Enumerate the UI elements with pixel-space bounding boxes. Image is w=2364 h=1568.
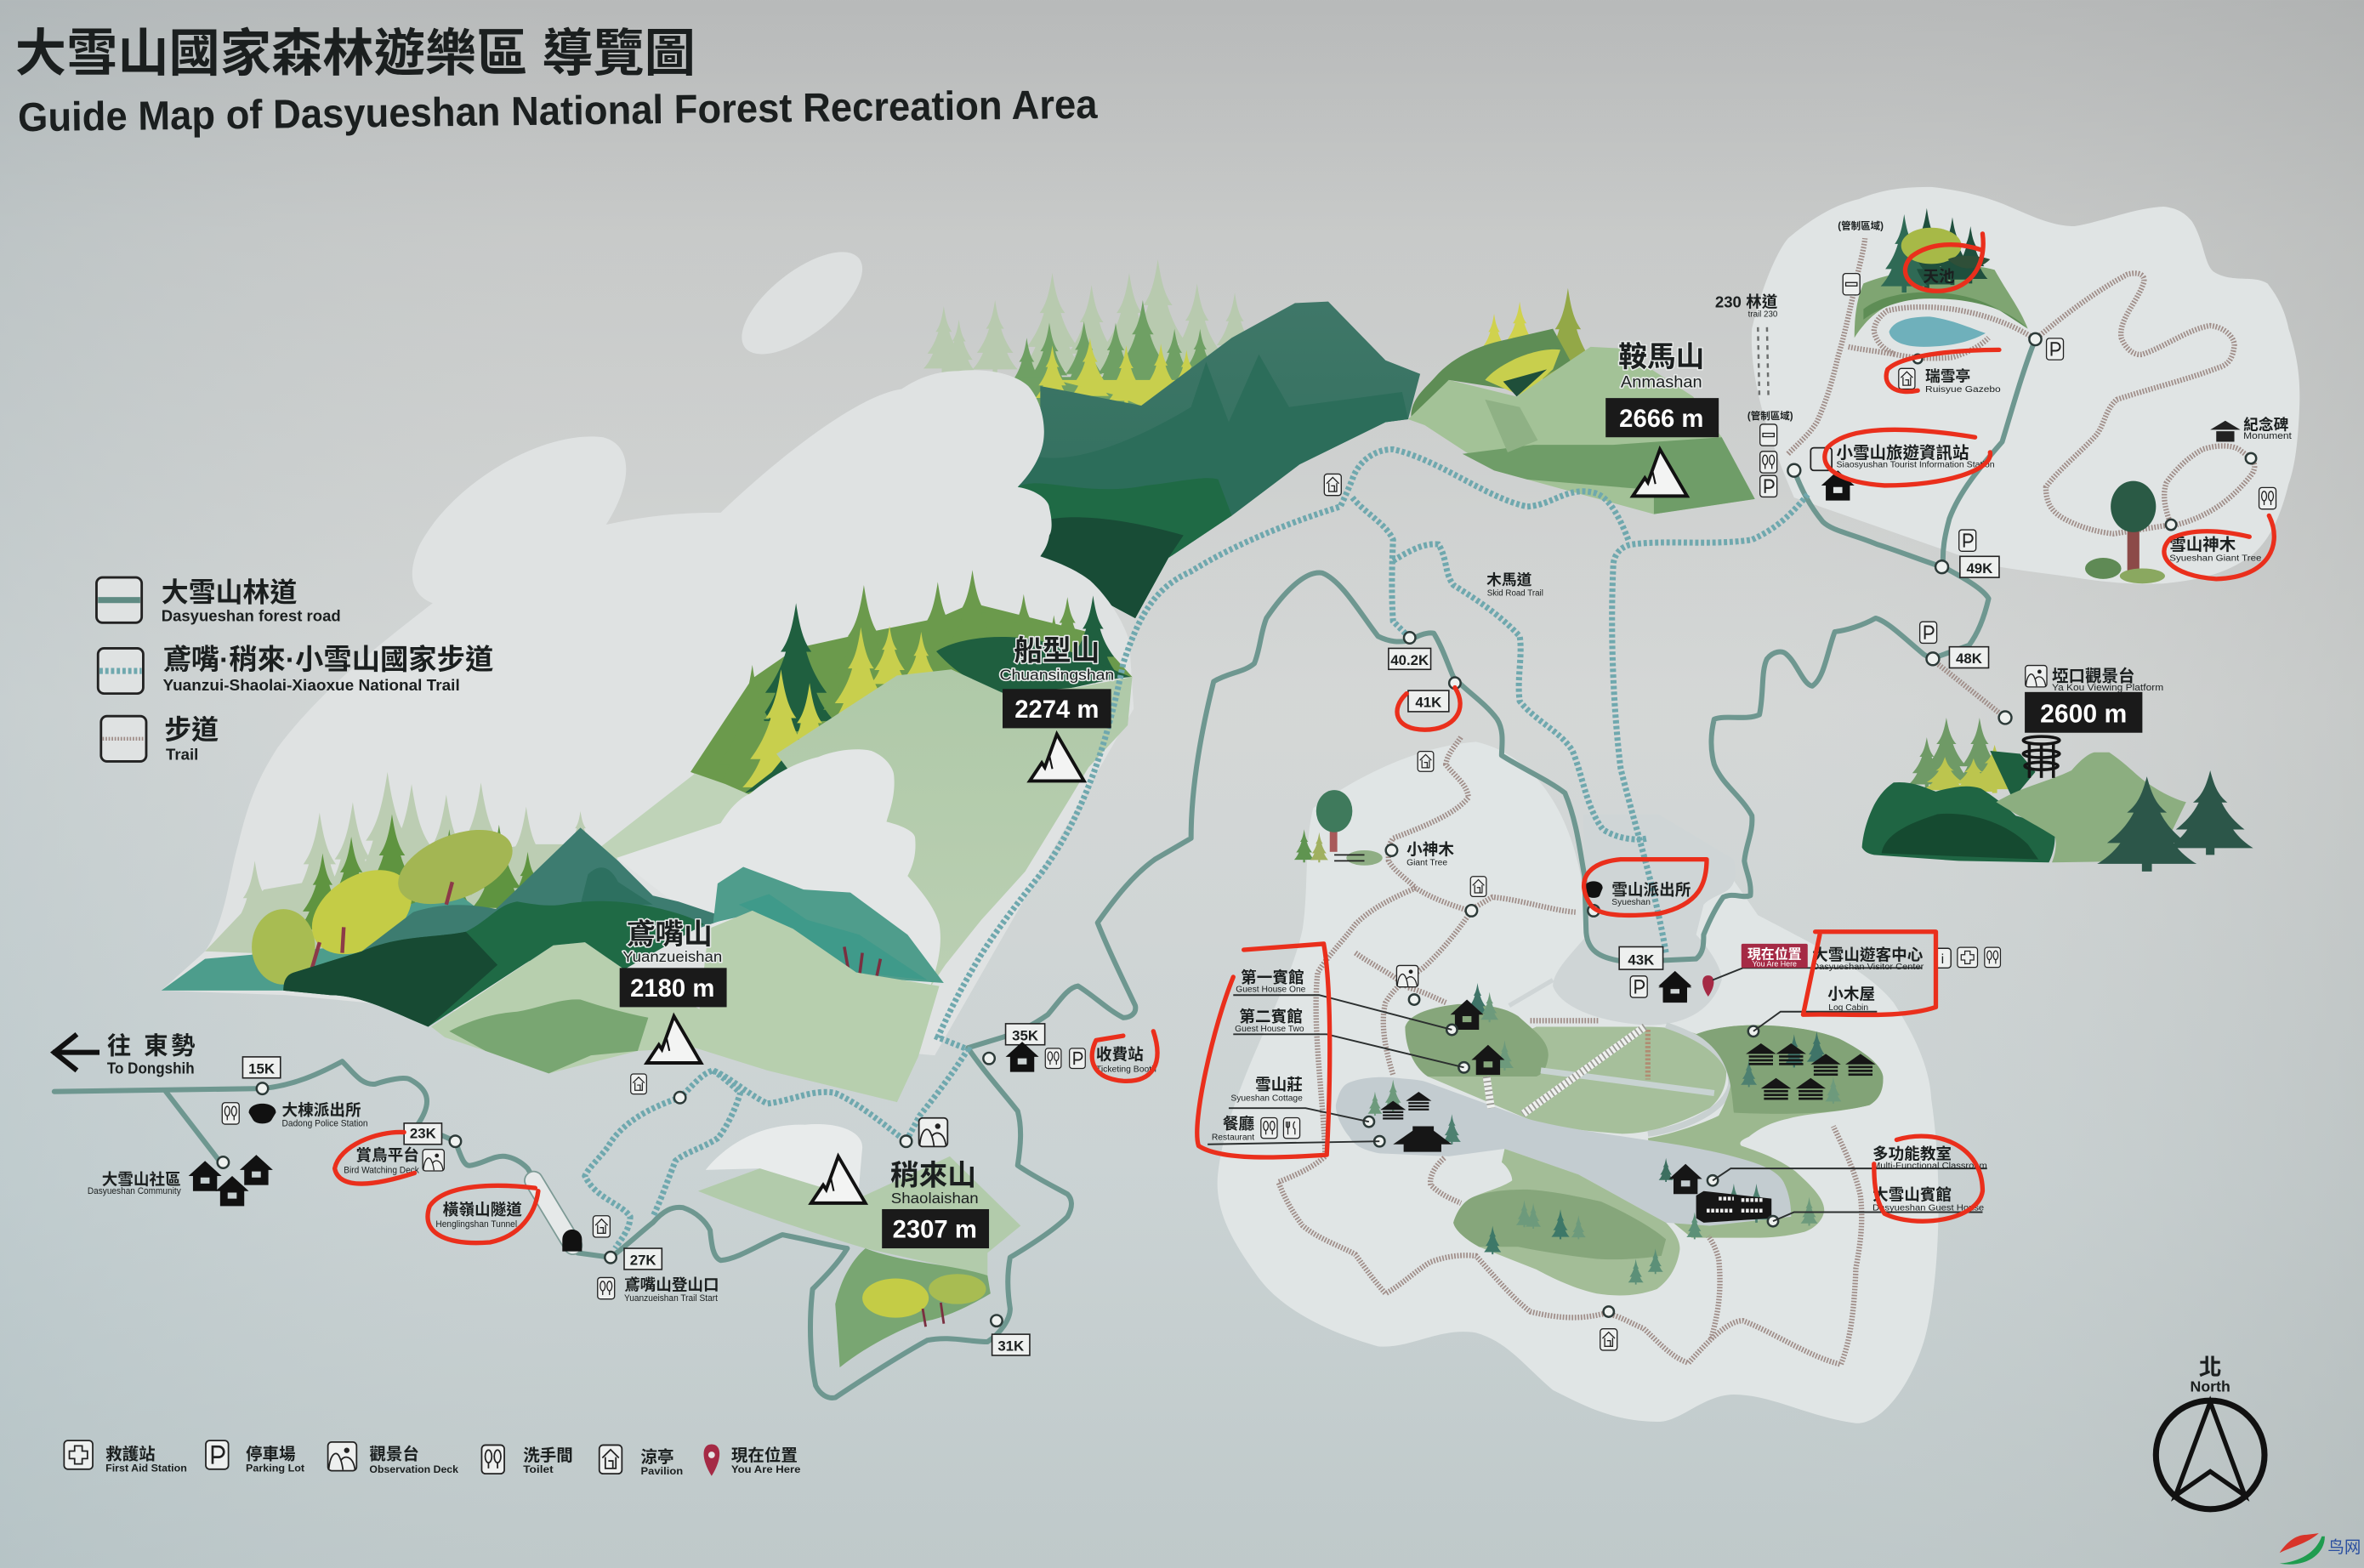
ticketing booth cluster [1006, 1042, 1156, 1075]
tunnel [534, 1180, 582, 1252]
Dadong police station: Dadong Police Station [282, 1118, 368, 1128]
log cabin label [1753, 986, 1877, 1031]
classroom and guest house labels: Dasyueshan Guest House [1872, 1204, 1985, 1213]
watermark logo: 鸟网 [2327, 1538, 2361, 1557]
trail 230 label: trail 230 [1748, 310, 1778, 319]
peak: Yuanzueishan: 2180 m [630, 975, 714, 1003]
region: Xiaoxueshan pale land [1752, 187, 2299, 584]
legend: road types [96, 577, 493, 764]
giant tree [2085, 481, 2165, 583]
km markers: 49K [1966, 560, 1992, 577]
road: community spur [166, 1092, 222, 1164]
restricted zone labels: (管制區域) [1747, 410, 1793, 422]
legend: facility icons: Toilet [523, 1463, 554, 1475]
white cloud land mass [162, 370, 1134, 1055]
pavilions on trail [593, 474, 1617, 1350]
Dadong police station [222, 1101, 368, 1128]
mountain group: central ridge [923, 259, 1420, 618]
inner white cloud [617, 749, 940, 1010]
km markers: 23K [410, 1126, 436, 1142]
Xiaoxueshan tourist info: 小雪山旅遊資訊站 [1836, 443, 1969, 463]
peak: Chuansingshan: 船型山 [1014, 635, 1100, 668]
title: Guide Map of Dasyueshan National Forest Recreation Area [18, 82, 1098, 140]
peak: Anmashan: 鞍馬山 [1618, 341, 1704, 373]
label: Dasyueshan community: Dasyueshan Community [88, 1186, 181, 1196]
visitor center [1630, 944, 2000, 1001]
bird watching deck [344, 1146, 444, 1175]
Henglingshan tunnel label: Henglingshan Tunnel [435, 1219, 517, 1230]
legend: facility icons: Pavilion [641, 1465, 683, 1477]
legend: road types: 大雪山林道 [162, 577, 297, 607]
community houses [189, 1155, 273, 1206]
legend: facility icons: Observation Deck [369, 1463, 458, 1475]
ticketing booth cluster: 收費站 [1096, 1045, 1144, 1063]
km markers: 43K [1628, 952, 1654, 969]
km markers: 27K [630, 1253, 656, 1269]
mountain group: Anmashan [1408, 288, 1755, 514]
km markers: 40.2K [1390, 652, 1429, 668]
Yuanzuishan trail start [598, 1276, 719, 1304]
km markers: 48K [1956, 650, 1982, 667]
legend: facility icons: Parking Lot [246, 1462, 304, 1474]
skid road label: Skid Road Trail [1487, 588, 1543, 598]
peak: Yakou platform: 2600 m [2040, 700, 2127, 728]
legend: facility icons: 救護站 [105, 1444, 156, 1463]
label: Dasyueshan community: 大雪山社區 [102, 1171, 181, 1189]
cloud ellipse [725, 234, 878, 372]
mountain group: Chuansingshan [690, 570, 1132, 1025]
peak: Anmashan: 2666 m [1619, 406, 1703, 433]
darker log cabin meadow [1696, 1025, 1884, 1114]
km markers: 31K [997, 1338, 1024, 1355]
guest house labels [1208, 969, 1464, 1145]
lane [1336, 1077, 1791, 1225]
skid road label: 木馬道 [1486, 571, 1532, 588]
monument: 紀念碑 [2243, 415, 2289, 433]
km markers: 35K [1012, 1027, 1038, 1043]
peak: Chuansingshan [999, 635, 1114, 781]
title [15, 24, 1098, 140]
hand-drawn red annotations [335, 234, 2274, 1243]
Xiaoxueshan tourist info [1810, 443, 1995, 501]
green pod: lower lawn [1453, 1149, 1679, 1295]
green pod: guest houses [1405, 1004, 1549, 1077]
km markers [242, 556, 1999, 1355]
km markers: 15K [248, 1060, 275, 1077]
Yuanzuishan trail start: Yuanzueishan Trail Start [624, 1293, 718, 1304]
small giant tree label: Giant Tree [1406, 859, 1447, 868]
lower lawn dark meadow [1453, 1190, 1666, 1259]
Syueshan police label [1584, 881, 1691, 907]
classroom and guest house labels: 多功能教室 [1872, 1145, 1952, 1162]
trail 230 label [1715, 293, 1778, 319]
Syueshan giant tree label [2169, 536, 2262, 564]
label: to Dongshih: 往 東勢 [107, 1032, 198, 1060]
monument [2210, 415, 2292, 442]
peak: Chuansingshan: 2274 m [1014, 696, 1099, 724]
classroom and guest house labels: 大雪山賓館 [1872, 1185, 1952, 1203]
km markers: 41K [1415, 695, 1441, 711]
trail 230 double dashed [1758, 327, 1769, 400]
peak: Yuanzueishan [620, 918, 727, 1063]
guest house labels: Restaurant [1212, 1133, 1254, 1142]
guest house labels: 雪山莊 [1255, 1076, 1303, 1094]
region: central forest area [1218, 741, 1939, 1423]
bird watching deck: 賞鳥平台 [355, 1146, 419, 1164]
legend: road types: Yuanzui-Shaolai-Xiaoxue National Trail [162, 676, 460, 694]
visitor center: i [1941, 952, 1944, 967]
peak: Shaolaishan group [698, 1124, 1020, 1367]
label: to Dongshih [107, 1032, 198, 1077]
observation icons [919, 965, 1418, 1146]
Ruixue gazebo: Ruisyue Gazebo [1925, 385, 2001, 395]
Tianchi label: 天池 [1923, 268, 1955, 286]
peak: Shaolaishan group: 2307 m [893, 1217, 977, 1244]
peak: Yakou platform: Ya Kou Viewing Platform [2052, 683, 2163, 693]
guest house labels: 第一賓館 [1241, 969, 1304, 986]
ticketing booth cluster: Ticketing Booth [1096, 1065, 1156, 1075]
Ruixue gazebo: 瑞雪亭 [1925, 367, 1970, 385]
small giant tree [1294, 790, 1383, 866]
watermark logo [2280, 1533, 2361, 1565]
peak: Chuansingshan: Chuansingshan [999, 667, 1114, 684]
peak: Yuanzueishan: Yuanzueishan [622, 948, 722, 965]
legend: facility icons: First Aid Station [105, 1462, 187, 1474]
legend: facility icons [64, 1440, 801, 1477]
peak: Yakou platform [2025, 666, 2163, 733]
mountain: Yakou [1862, 718, 2253, 872]
Syueshan police label: 雪山派出所 [1611, 881, 1691, 899]
restricted zone labels: (管制區域) [1838, 220, 1884, 232]
national trail network [585, 449, 1808, 1248]
legend: road types: 步道 [164, 714, 219, 745]
classroom and guest house labels: Multi-Functional Classroom [1872, 1162, 1987, 1171]
small giant tree label [1406, 840, 1454, 868]
lawn [1428, 1026, 1726, 1133]
observation tower [2023, 736, 2060, 778]
pond and Tianchi hill [1855, 208, 2028, 347]
peak: Yakou platform: 埡口觀景台 [2052, 666, 2135, 685]
Dadong police station: 大棟派出所 [282, 1101, 361, 1119]
guest house labels: 餐廳 [1223, 1115, 1254, 1133]
road nodes [218, 333, 2256, 1327]
legend: road types: 鳶嘴·稍來·小雪山國家步道 [162, 645, 493, 676]
Syueshan police label: Syueshan [1611, 898, 1651, 907]
title: 大雪山國家森林遊樂區 導覽圖 [15, 24, 696, 82]
north compass: North [2191, 1378, 2230, 1395]
guest house labels: Guest House Two [1235, 1025, 1304, 1034]
guest house labels: 第二賓館 [1239, 1008, 1303, 1025]
north compass [2156, 1355, 2265, 1509]
Xiaoxueshan tourist info: Siaosyushan Tourist Information Station [1836, 461, 1995, 470]
road: forest road 200 [54, 339, 2035, 1398]
Henglingshan tunnel label [435, 1201, 522, 1230]
legend: facility icons: 洗手間 [523, 1446, 573, 1465]
Yuanzuishan trail start: 鳶嘴山登山口 [624, 1276, 719, 1294]
north compass: 北 [2199, 1355, 2221, 1380]
Syueshan giant tree label: Syueshan Giant Tree [2169, 554, 2262, 564]
road: spur to Xiaoxueshan station [1794, 470, 1942, 567]
gray visitor center zone [1553, 814, 1736, 1025]
trail 230 label: 230 林道 [1715, 293, 1778, 311]
restricted zone labels [1747, 220, 1884, 422]
Henglingshan tunnel label: 橫嶺山隧道 [443, 1201, 522, 1219]
legend: facility icons: 觀景台 [369, 1444, 419, 1463]
legend: facility icons: 涼亭 [641, 1447, 674, 1467]
parking and restricted icons north [1760, 274, 2276, 643]
legend: road types: Trail [166, 746, 198, 764]
peak: Anmashan: Anmashan [1621, 373, 1702, 392]
trees and buildings in forest area [1367, 973, 1876, 1285]
guest house labels: Syueshan Cottage [1230, 1094, 1303, 1103]
Ruixue gazebo [1899, 367, 2001, 395]
peak: Anmashan [1605, 341, 1719, 496]
Syueshan giant tree label: 雪山神木 [2169, 536, 2236, 554]
bird watching deck: Bird Watching Deck [344, 1165, 420, 1175]
small giant tree label: 小神木 [1406, 840, 1454, 858]
visitor center: 現在位置 [1747, 946, 1802, 963]
legend: facility icons: 停車場 [246, 1445, 296, 1463]
hiking trail network [1278, 238, 2254, 1365]
label: to Dongshih: To Dongshih [107, 1059, 195, 1077]
label: Dasyueshan community [88, 1171, 181, 1196]
guest house labels: Guest House One [1236, 986, 1306, 995]
lower-left pale slope [600, 774, 749, 860]
log cabin label: Log Cabin [1828, 1003, 1868, 1013]
peak: Yuanzueishan: 鳶嘴山 [627, 918, 713, 951]
legend: facility icons: 現在位置 [731, 1446, 798, 1465]
legend: road types: Dasyueshan forest road [162, 607, 341, 625]
arrow to Dongshih [53, 1034, 99, 1071]
visitor center: You Are Here [1753, 960, 1797, 969]
skid road label [1486, 571, 1543, 598]
lawn ring road [1648, 1025, 1731, 1133]
visitor center: 大雪山遊客中心 [1812, 946, 1924, 963]
legend: facility icons: You Are Here [731, 1463, 801, 1475]
mountain group: Yuanzueishan [162, 772, 944, 1102]
log cabin label: 小木屋 [1827, 986, 1875, 1003]
monument: Monument [2243, 431, 2292, 441]
visitor center: Dasyueshan Visitor Center [1812, 963, 1924, 972]
peak: Shaolaishan group: 稍來山 [890, 1160, 976, 1192]
classroom and guest house labels [1713, 1145, 1987, 1221]
peak: Shaolaishan group: Shaolaishan [891, 1190, 979, 1207]
green pod: log cabins [1648, 1025, 1884, 1238]
